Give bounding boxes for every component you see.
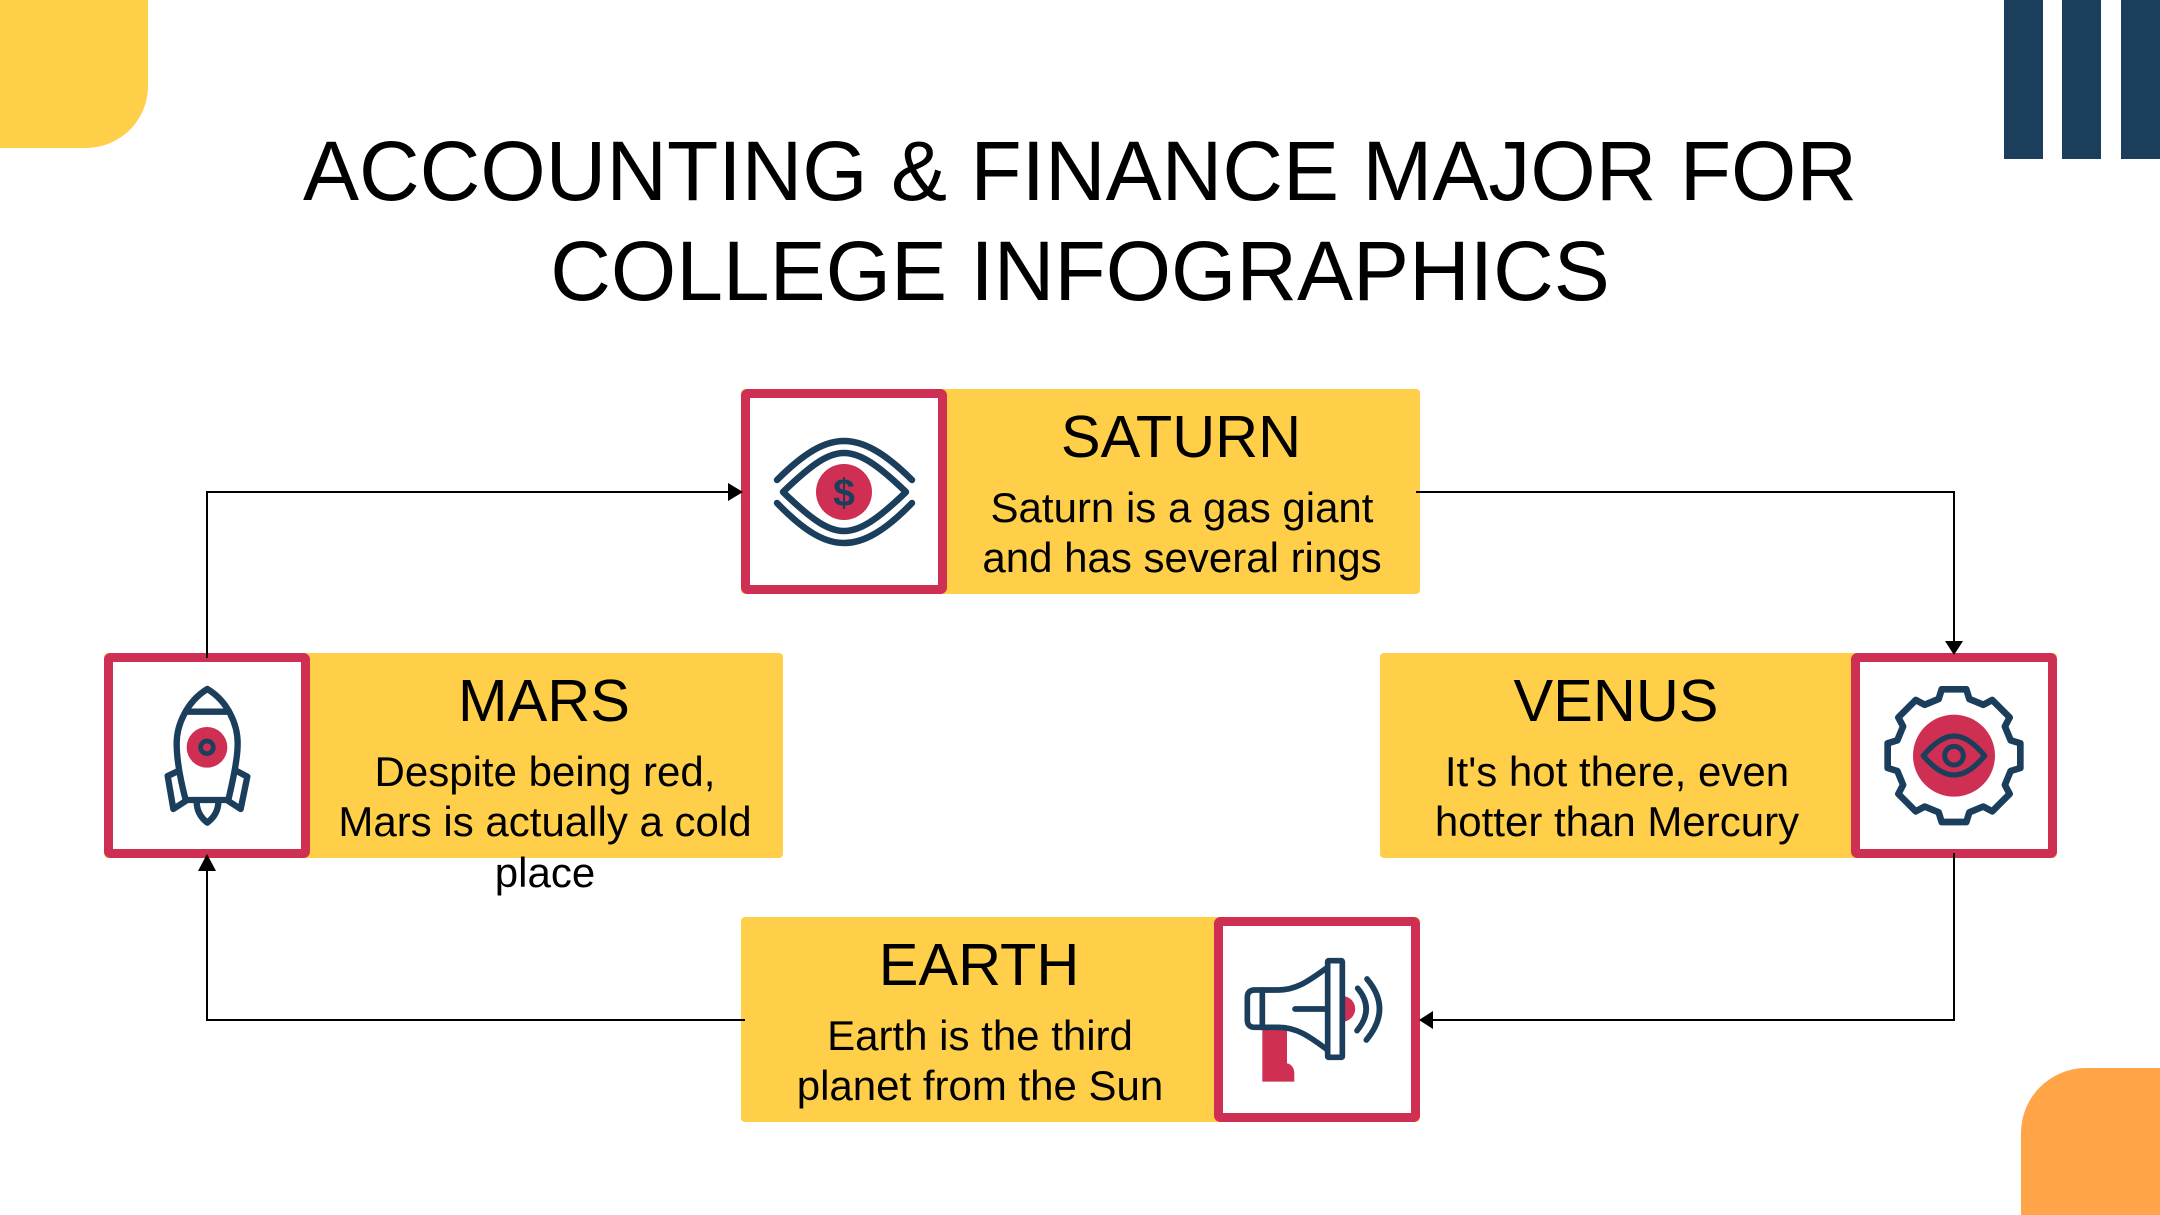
mars card background (104, 653, 783, 858)
arrow: saturn to venus (1416, 492, 1963, 655)
icon: gear with eye (1888, 689, 2020, 822)
earth description: Earth is the third (827, 1012, 1133, 1059)
mars description (338, 748, 752, 896)
earth heading: EARTH (879, 931, 1079, 998)
icon: eye with dollar (777, 441, 912, 543)
panel: earth (741, 917, 1420, 1122)
saturn description: Saturn is a gas giant (991, 484, 1374, 531)
saturn description: and has several rings (982, 534, 1382, 581)
title (303, 124, 1857, 318)
arrow: earth to mars (198, 854, 745, 1020)
mars description: place (495, 849, 595, 896)
panel: saturn (741, 389, 1420, 594)
venus description (1435, 748, 1799, 845)
venus description: hotter than Mercury (1435, 798, 1799, 845)
venus description: It's hot there, even (1445, 748, 1789, 795)
decoration: orange corner (2021, 1068, 2160, 1215)
panel: venus (1380, 653, 2057, 858)
venus heading: VENUS (1514, 667, 1718, 734)
decoration: navy bars (2004, 0, 2160, 159)
earth description: planet from the Sun (797, 1062, 1163, 1109)
icon: eye with dollar: $ (833, 472, 855, 515)
mars icon frame (108, 658, 306, 854)
earth icon frame (1218, 922, 1416, 1118)
arrow: mars to saturn (207, 483, 743, 658)
icon: megaphone (1247, 961, 1380, 1082)
mars heading: MARS (458, 667, 630, 734)
panel: mars (104, 653, 783, 896)
venus card background (1380, 653, 2057, 858)
saturn heading: SATURN (1061, 403, 1301, 470)
saturn card background (741, 389, 1420, 594)
venus icon frame (1856, 658, 2052, 854)
mars description: Despite being red, (375, 748, 715, 795)
saturn description (982, 484, 1382, 581)
earth description (797, 1012, 1163, 1109)
mars description: Mars is actually a cold (338, 798, 752, 845)
title: COLLEGE INFOGRAPHICS (550, 224, 1610, 318)
title: ACCOUNTING & FINANCE MAJOR FOR (303, 124, 1857, 218)
icon: rocket (168, 689, 247, 823)
decoration: yellow corner (0, 0, 148, 148)
saturn icon frame (746, 394, 942, 590)
earth card background (741, 917, 1420, 1122)
arrow: venus to earth (1419, 853, 1954, 1029)
